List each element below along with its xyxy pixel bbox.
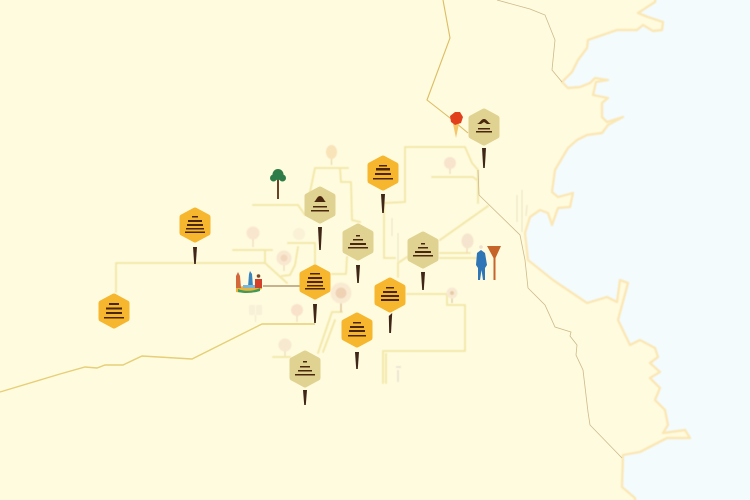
icon: pale tree 9 bbox=[446, 288, 458, 303]
connector: group to marker bbox=[263, 285, 300, 287]
icon: pale tree 8 bbox=[462, 234, 474, 253]
border line west bbox=[427, 0, 468, 133]
marker: tan 1 bbox=[471, 111, 497, 168]
icon: pale tree 2 bbox=[444, 157, 456, 174]
marker: tan 3 bbox=[345, 226, 371, 283]
road network bbox=[116, 147, 488, 383]
marker: gold 5 bbox=[377, 280, 403, 333]
icon: pale tree 4 bbox=[293, 228, 305, 240]
pale vertical marks near shore bbox=[392, 190, 527, 262]
regional road bbox=[0, 324, 315, 392]
marker: gold 3 bbox=[370, 158, 396, 213]
marker: gold 1 bbox=[182, 210, 208, 264]
icon: red marker with flame bbox=[450, 112, 463, 138]
marker: tan 2 bbox=[307, 189, 333, 250]
icon: pale tree 7 bbox=[278, 338, 292, 356]
icon: pale tree 5 bbox=[276, 250, 292, 271]
icon: large pale tree bbox=[330, 282, 352, 312]
icon: pale tree 3 bbox=[246, 226, 260, 247]
marker: tan 5 bbox=[292, 353, 318, 405]
marker: tan 4 bbox=[410, 234, 436, 290]
icon: blue person bbox=[476, 245, 487, 280]
border line east bbox=[478, 0, 622, 458]
sea with coastline bbox=[525, 0, 750, 500]
icon: green tree bbox=[270, 169, 286, 199]
icon: pale tree 6 bbox=[291, 304, 303, 322]
marker: gold 2 bbox=[101, 296, 127, 326]
marker: gold 4 bbox=[302, 267, 328, 323]
marker: gold 6 bbox=[344, 315, 370, 369]
icon: pale figure bbox=[396, 367, 401, 382]
icon: orange funnel bbox=[487, 246, 501, 280]
icon: pale book bbox=[249, 305, 262, 322]
icon: pale tree 1 bbox=[326, 145, 337, 165]
icon: people group bbox=[236, 271, 262, 293]
